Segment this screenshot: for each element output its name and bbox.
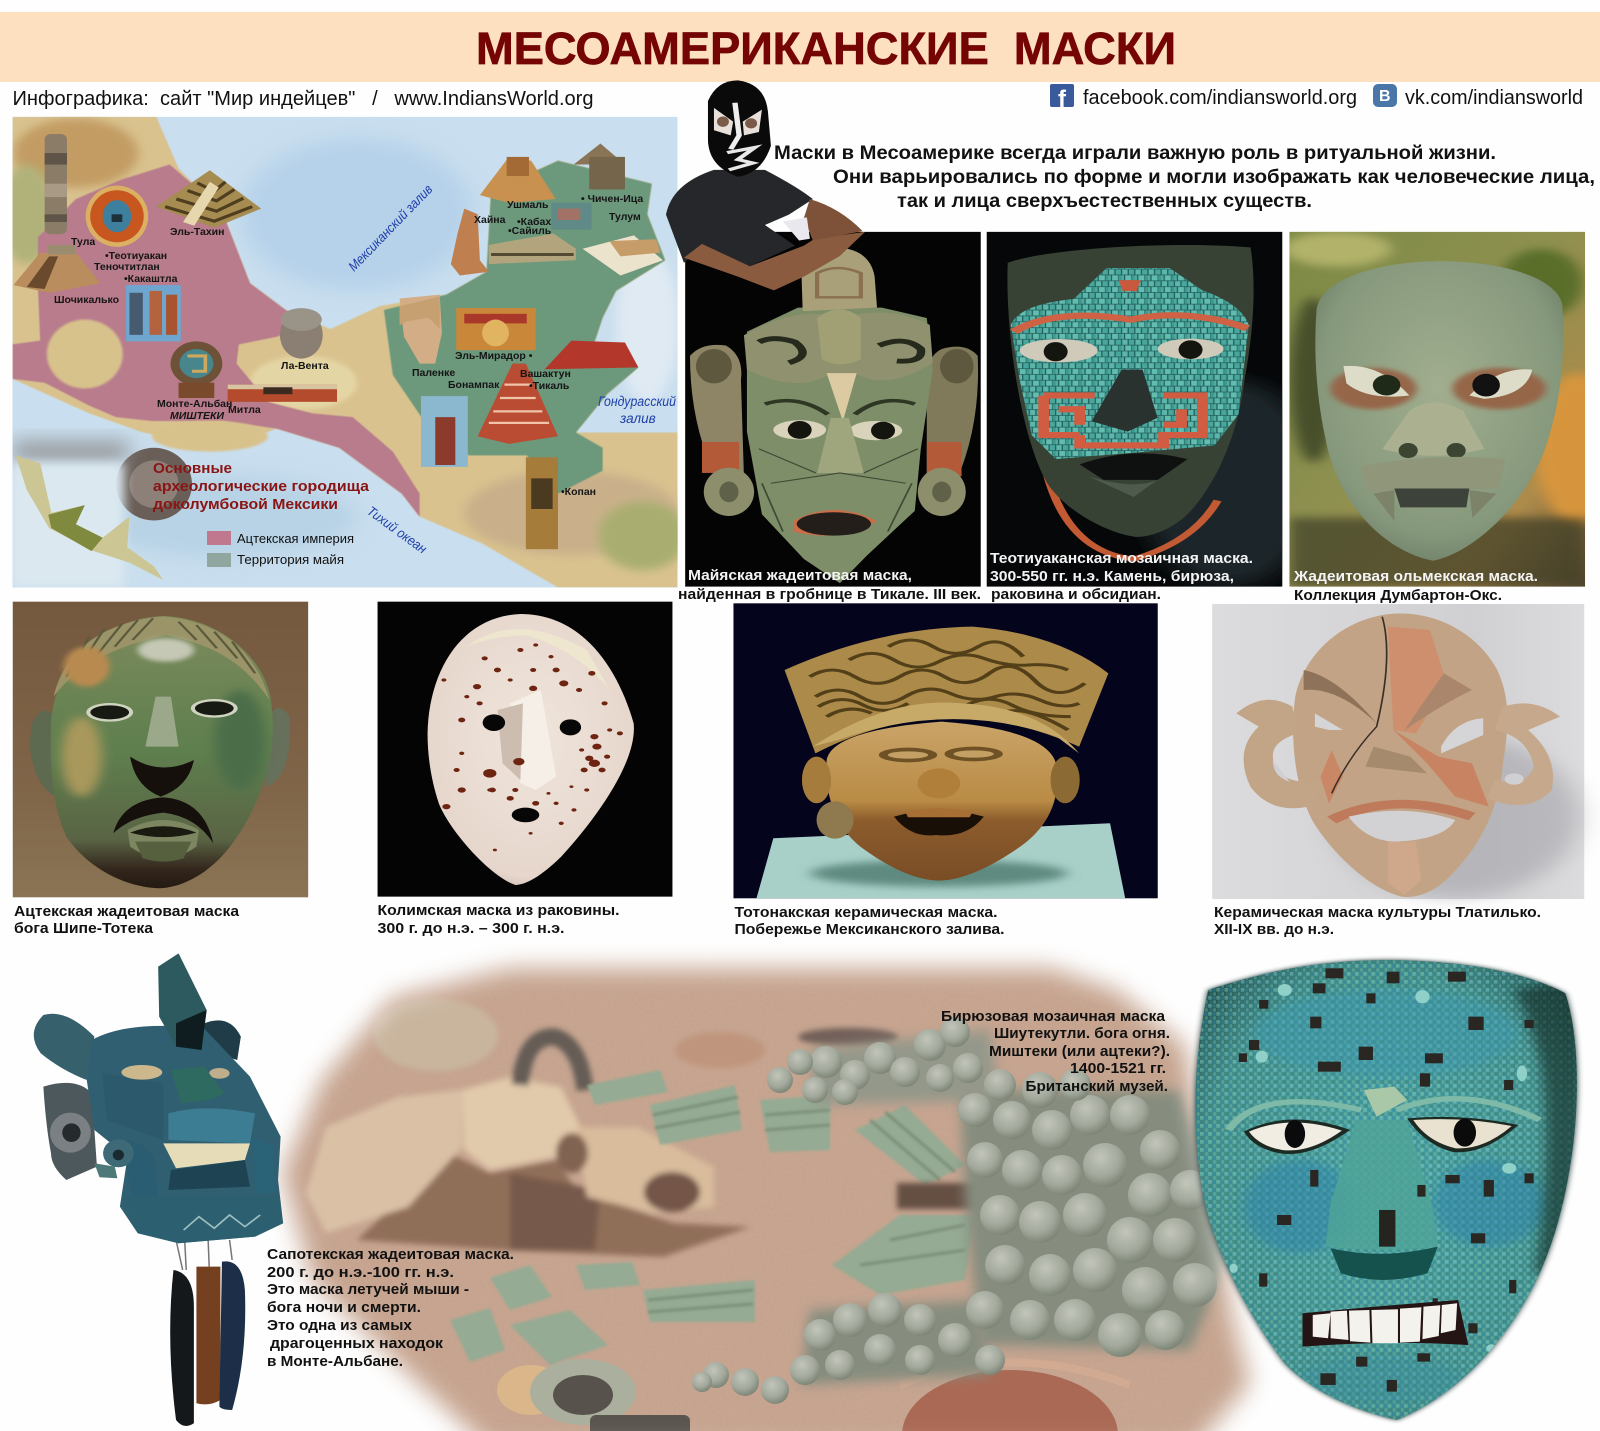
caption: Olmec mask: Жадеитовая ольмекская маска. [1293,568,1538,585]
social links [1050,84,1583,113]
caption: Tlatilco mask: XII-IX вв. до н.э. [1214,921,1334,938]
Maya territory region [384,161,665,494]
skull and rubble [306,999,765,1257]
icon: facebook: f [1058,86,1067,113]
photo: Colima shell mask [378,602,672,897]
eyes [1244,1117,1518,1154]
caption: Teotihuacan mask [990,550,1253,603]
map panel [0,117,687,587]
caption: Totonac mask: Побережье Мексиканского залива. [734,921,1004,938]
pale nodules [1230,984,1527,1352]
caption: Zapotec mask: Это маска летучей мыши - [267,1281,469,1298]
map legend: Ацтекская империя [237,531,354,546]
map site labels: Вашактун [520,368,571,380]
caption: Zapotec mask: бога ночи и смерти. [267,1299,421,1316]
site credit line: Инфографика: сайт "Мир индейцев" / www.IndiansWorld.org [12,88,594,110]
caption: Maya mask: найденная в гробнице в Тикале. III век. [678,586,981,603]
map artwork [0,117,687,587]
dark chips [1239,968,1534,1392]
wrestler figure [666,80,865,290]
caption: Maya mask [678,567,981,603]
caption: turquoise mask: Британский музей. [1026,1078,1168,1095]
intro text: Они варьировались по форме и могли изображать как человеческие лица, [833,167,1595,188]
bowl rock and dark fragments [497,1028,1130,1431]
map site labels: •Тикаль [529,380,570,392]
photo: Maya jade mask [685,232,981,587]
caption: Totonac mask: Тотонакская керамическая маска. [734,904,998,921]
facebook address: facebook.com/indiansworld.org [1083,87,1357,109]
map legend: Территория майя [237,552,344,567]
caption: Zapotec mask [267,1246,514,1370]
caption: Olmec mask: Коллекция Думбартон-Окс. [1294,587,1502,604]
teeth [1303,1300,1468,1347]
caption: turquoise mask: 1400-1521 гг. [1070,1060,1166,1077]
icon: vk [1373,84,1397,107]
faded burial scene background [278,952,1263,1431]
photo: Tlatilco ceramic mask [1212,604,1584,899]
map site labels: •Кабах [517,216,551,228]
intro text [774,143,1595,212]
caption: Maya mask: Майяская жадеитовая маска, [688,567,912,584]
caption: Aztec mask: бога Шипе-Тотека [14,920,154,937]
caption: Zapotec mask: 200 г. до н.э.-100 гг. н.э. [267,1264,454,1281]
caption: turquoise mask: Шиутекутли. бога огня. [994,1025,1170,1042]
map legend [207,531,354,567]
caption: Aztec mask [14,903,240,937]
caption: Zapotec mask: в Монте-Альбане. [267,1353,403,1370]
map site labels: Паленке [412,367,455,379]
map heading: доколумбовой Мексики [153,497,338,513]
map site labels: Шочикалько [54,294,119,306]
caption: turquoise mask: Миштеки (или ацтеки?). [989,1043,1170,1060]
caption: turquoise mask [941,1008,1170,1095]
map site labels [54,193,643,498]
map site labels: • Чичен-Ица [581,193,643,205]
photo: Olmec jade mask [1283,232,1600,587]
brow ridges and nose [1229,1099,1540,1130]
map site labels: •Теотиуакан [105,250,167,262]
monuments [13,134,663,549]
map site labels: Ла-Вента [281,360,329,372]
map site labels: •Сайиль [508,225,552,237]
sea labels: Мексиканский залив [345,182,435,274]
map heading [153,461,370,513]
title banner [0,12,1600,82]
sea labels: Гондурасский [598,394,676,409]
turquoise mosaic mask of Xiuhtecuhtli [1188,957,1586,1423]
map site labels: Тула [71,236,95,248]
map site labels: •Копан [561,486,596,498]
caption: Tlatilco mask [1214,904,1541,938]
map site labels: Эль-Тахин [170,226,224,238]
caption: Teotihuacan mask: раковина и обсидиан. [991,586,1161,603]
caption: turquoise mask: Бирюзовая мозаичная маска [941,1008,1166,1025]
map site labels: Эль-Мирадор • [455,350,533,362]
caption: Colima mask: Колимская маска из раковины. [378,902,620,919]
photo: Aztec jade mask [13,602,308,897]
caption: Olmec mask [1293,568,1538,604]
pendants [170,1240,245,1426]
title: МЕСОАМЕРИКАНСКИЕ МАСКИ [476,23,1176,74]
inset shadow and inset map [12,440,163,587]
sea labels: Тихий океан [364,503,430,557]
jade bars and tiles [450,1070,975,1365]
icon: facebook [1050,84,1074,113]
intro text: Маски в Месоамерике всегда играли важную роль в ритуальной жизни. [774,143,1496,164]
jade beads [692,1017,1235,1404]
Zapotec jade bat mask [34,953,283,1426]
caption: Zapotec mask: Это одна из самых [267,1317,413,1334]
caption: Tlatilco mask: Керамическая маска культуры Тлатилько. [1214,904,1541,921]
map site labels: Ушмаль [507,199,549,211]
map site labels: Тулум [609,211,641,223]
map site labels: МИШТЕКИ [170,410,224,422]
Aztec empire region [12,165,420,517]
caption: Colima mask [378,902,620,937]
caption: Teotihuacan mask: Теотиуаканская мозаичная маска. [990,550,1253,567]
sea labels [345,182,676,557]
sea labels: залив [619,411,656,426]
caption: Teotihuacan mask: 300-550 гг. н.э. Камень, бирюза, [990,568,1234,585]
caption: Totonac mask [734,904,1004,938]
map site labels: Хайна [474,214,506,226]
map site labels: Теночтитлан [94,261,160,273]
caption: Zapotec mask: Сапотекская жадеитовая маска. [267,1246,514,1263]
caption: Colima mask: 300 г. до н.э. – 300 г. н.э. [378,920,564,937]
map heading: Основные [153,461,232,477]
map site labels: Бонампак [448,379,500,391]
map site labels: Монте-Альбан [157,398,232,410]
photo: Teotihuacan mosaic mask [986,232,1282,587]
icon: vk: B [1379,88,1391,105]
photo: Totonac ceramic mask [733,603,1158,898]
vk address: vk.com/indiansworld [1405,87,1583,109]
caption: Aztec mask: Ацтекская жадеитовая маска [14,903,240,920]
map site labels: •Какаштла [124,273,178,285]
map site labels: Митла [228,404,261,416]
map heading: археологические городища [153,479,370,495]
intro text: так и лица сверхъестественных существ. [897,191,1312,212]
caption: Zapotec mask: драгоценных находок [270,1335,444,1352]
